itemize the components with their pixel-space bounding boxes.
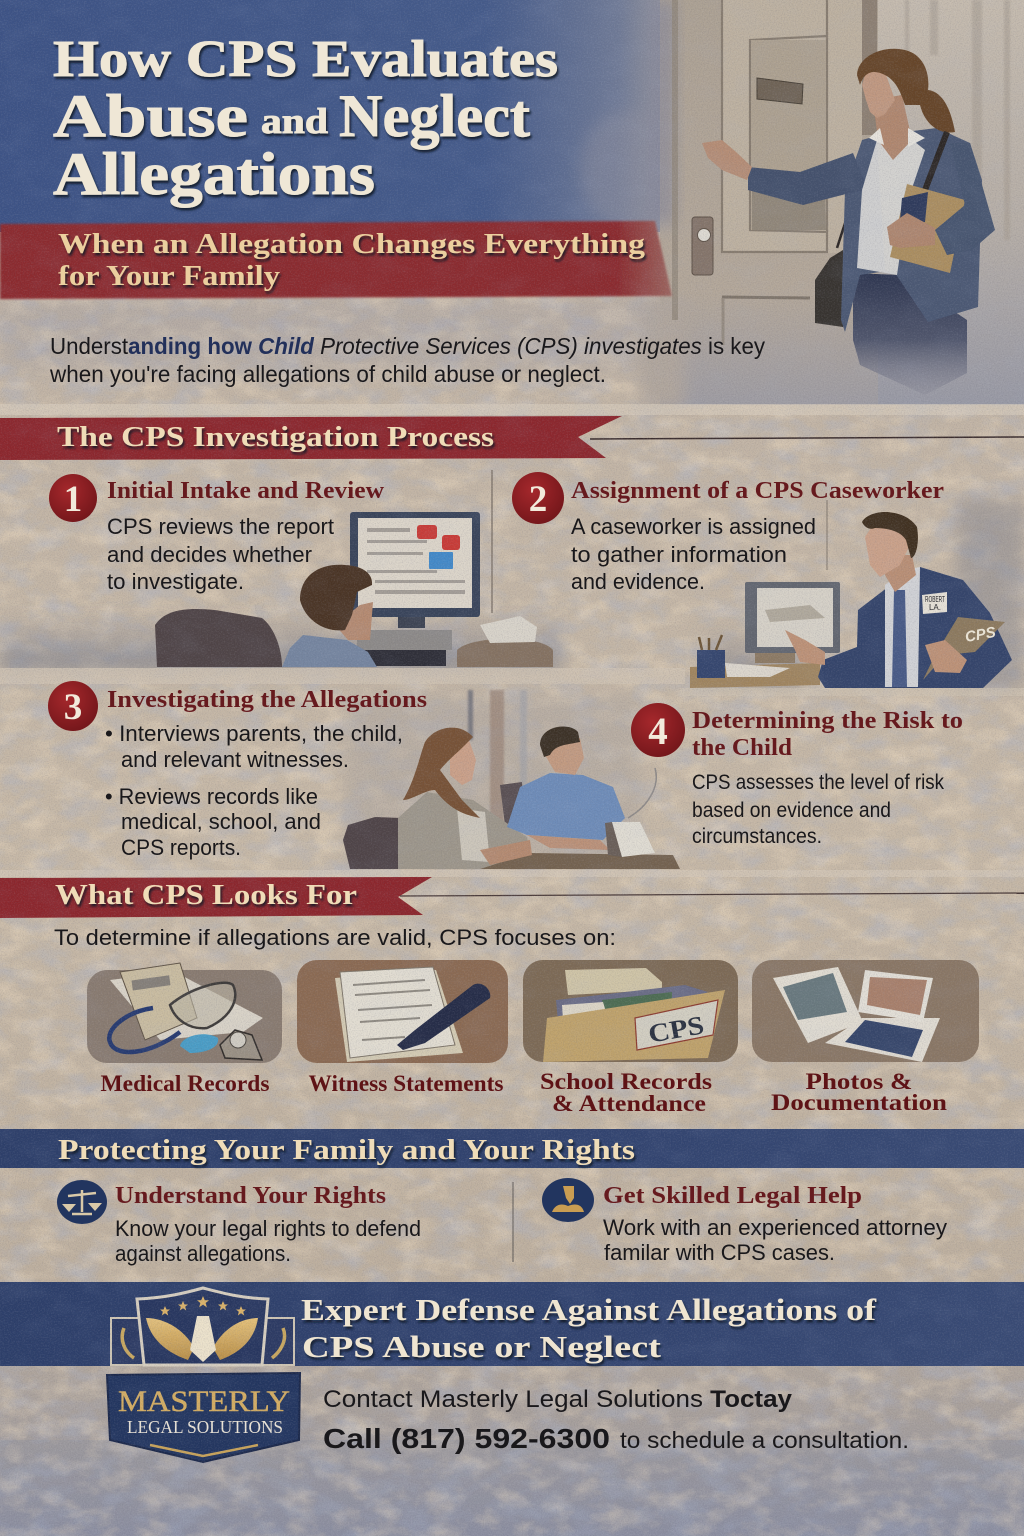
step 2 text: to gather information [571,542,787,567]
step 1 text: and decides whether [107,542,312,567]
legal help heading: Get Skilled Legal Help [603,1183,862,1209]
contact line: Contact Masterly Legal Solutions Toctay [323,1386,793,1413]
step 2 text: and evidence. [571,569,705,594]
heading: what cps looks for: What CPS Looks For [55,880,357,911]
caseworker badge and folder lettering [925,595,997,646]
legal help text [603,1215,947,1265]
illustration: step 3 parent and attorney [343,690,680,869]
step 1 text: CPS reviews the report [107,514,334,539]
step 3 bullets: medical, school, and [121,809,321,834]
rights text [115,1216,421,1266]
icon: attorney [542,1178,594,1222]
number badge 3 [48,681,98,731]
intro text [49,333,765,387]
step 4 text [692,771,944,848]
subtitle: for Your Family [58,260,281,292]
heading: expert defense: Expert Defense Against Allegations of [301,1292,877,1327]
caseworker badge and folder lettering: ROBERT [925,595,945,604]
number badge 4 [631,703,685,757]
step 3 bullets: and relevant witnesses. [121,747,349,772]
step 2 text: A caseworker is assigned [571,514,816,539]
number badge 3: 3 [64,687,82,728]
title: Abuse [53,83,248,149]
label: photos and documentation [771,1069,947,1115]
heading: expert defense: CPS Abuse or Neglect [302,1329,662,1364]
step 2 heading: Assignment of a CPS Caseworker [571,478,944,504]
intro text: Understanding how Child Protective Services (CPS) investigates is key [50,333,765,359]
vertical divider [512,1182,514,1262]
step 4 text: circumstances. [692,825,822,848]
number badge 1 [49,474,97,522]
label: photos and documentation: Photos & [806,1069,912,1094]
step 1 [49,474,385,594]
label: medical records: Medical Records [100,1071,270,1096]
illustration: woman at door [702,49,995,395]
title [53,31,558,207]
intro text: when you're facing allegations of child abuse or neglect. [49,361,606,387]
step 3 bullets: • Interviews parents, the child, [105,721,403,746]
call to action [323,1423,909,1454]
subtitle [58,228,646,292]
caseworker badge and folder lettering: LA. [929,603,941,612]
illustration: step 2 caseworker [690,512,1012,688]
step 1 text [107,514,334,594]
step 3 [48,681,427,860]
logo subtitle: LEGAL SOLUTIONS [127,1417,283,1437]
step 3 heading: Investigating the Allegations [107,687,427,713]
tile: witness statements image [297,960,508,1063]
subtitle: When an Allegation Changes Everything [58,228,646,260]
heading: expert defense [301,1292,877,1364]
tile: school records image [523,960,738,1062]
blue band: expert defense [0,1282,1024,1366]
rights text: Know your legal rights to defend [115,1216,421,1241]
rights heading: Understand Your Rights [115,1183,386,1209]
label: school records: School Records [540,1069,712,1094]
phone number: Call (817) 592-6300 [323,1423,610,1454]
step 4 [631,703,963,848]
label: school records [540,1069,712,1116]
red subtitle banner [0,221,672,299]
heading: protecting your family: Protecting Your Family and Your Rights [58,1135,635,1166]
section ribbon: what cps looks for [0,870,1024,918]
label: witness statements: Witness Statements [308,1071,504,1096]
step 3 bullets: CPS reports. [121,835,241,860]
scene backdrops [0,470,1024,696]
section ribbon: process [0,404,1024,460]
tile: medical records image [87,963,282,1063]
emblem: eagle shield [111,1288,294,1365]
step 4 heading: Determining the Risk to [692,708,963,734]
caseworker badge and folder lettering: CPS [964,624,997,646]
tile: photos and documentation image [752,960,979,1062]
illustration: step 1 desk [155,512,553,667]
consultation text: to schedule a consultation. [620,1427,909,1453]
step 3 bullets: • Reviews records like [105,784,318,809]
legal help text: Work with an experienced attorney [603,1215,947,1240]
title: Allegations [53,141,375,207]
legal help text: familar with CPS cases. [604,1240,835,1265]
illustration: door [672,0,877,345]
number badge 2 [512,472,564,524]
step 1 heading: Initial Intake and Review [107,478,385,504]
icon: scales [57,1180,107,1224]
step 2 [512,472,944,594]
heading: process: The CPS Investigation Process [57,421,494,453]
step 3 bullets [105,721,403,860]
step 4 heading: the Child [692,735,793,761]
step 4 text: based on evidence and [692,799,891,822]
step 2 text [571,514,816,594]
title: Neglect [339,83,530,149]
rights text: against allegations. [115,1241,291,1266]
number badge 4: 4 [648,710,668,753]
step 4 heading [692,708,963,761]
what cps looks for intro: To determine if allegations are valid, CPS focuses on: [54,925,616,950]
number badge 2: 2 [529,479,547,520]
number badge 1: 1 [64,479,82,520]
title: and [261,101,328,141]
tile: school records image: CPS [646,1010,706,1049]
hero background [0,0,1024,408]
blue band: protecting [0,1129,1024,1168]
label: photos and documentation: Documentation [771,1090,947,1115]
logo wordmark: MASTERLY [118,1385,290,1418]
step 1 text: to investigate. [107,569,244,594]
title: How CPS Evaluates [53,31,558,88]
step 4 text: CPS assesses the level of risk [692,771,944,794]
label: school records: & Attendance [552,1091,706,1116]
logo: masterly shield [107,1373,300,1462]
